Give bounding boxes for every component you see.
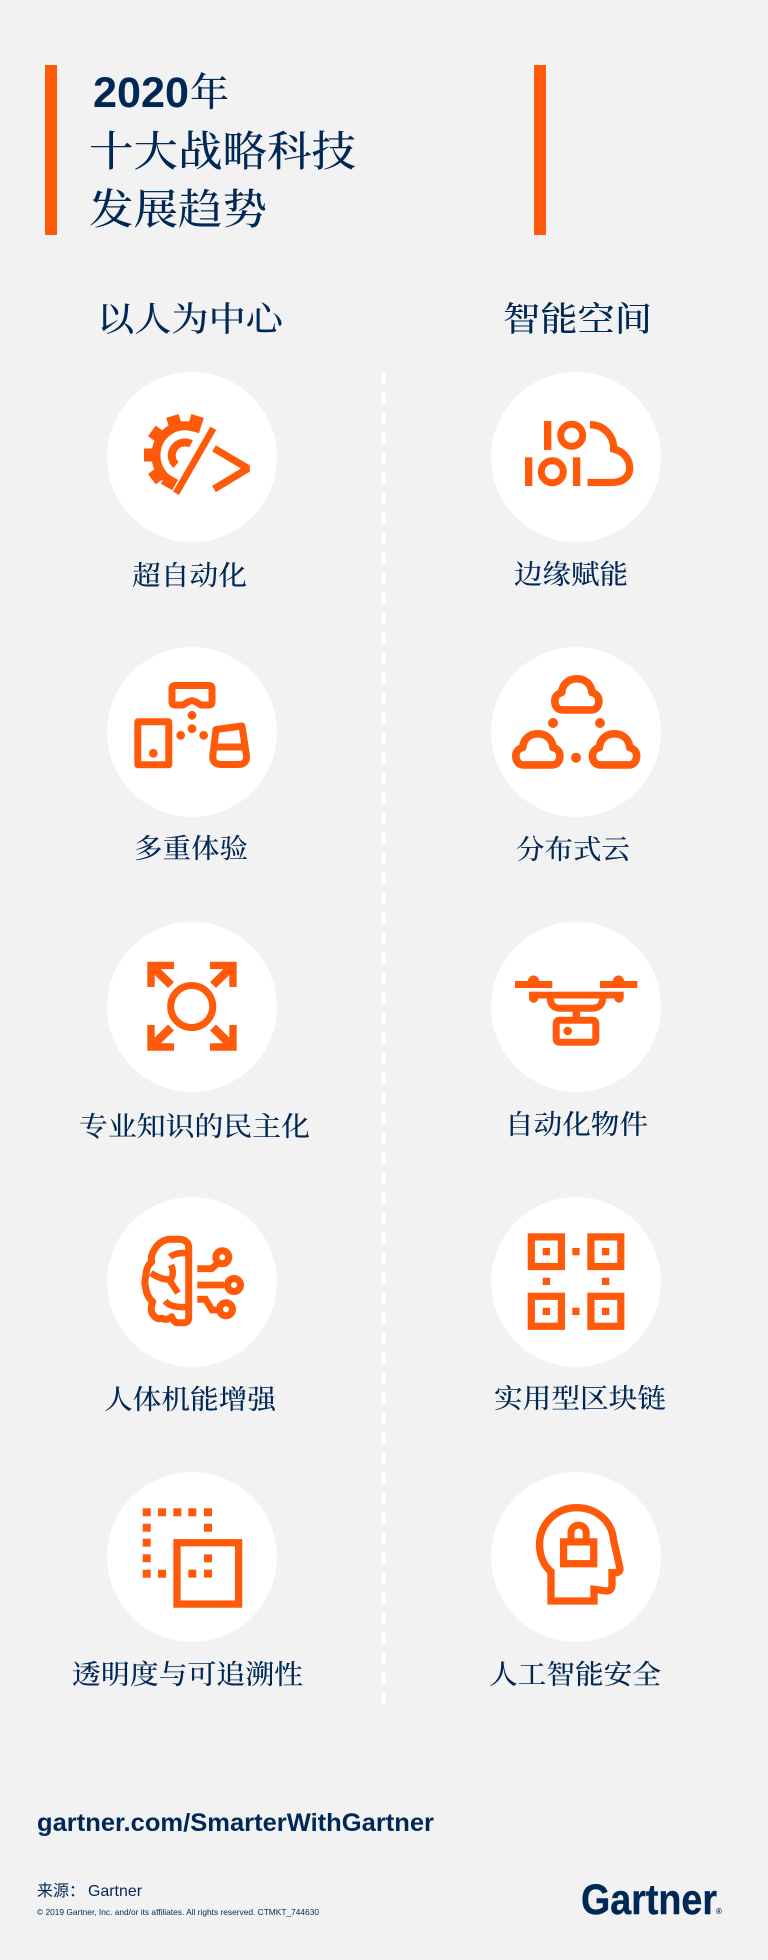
- label: 透明度与可追溯性: [72, 1660, 303, 1690]
- footer URL: gartner.com/SmarterWithGartner: [37, 1809, 434, 1837]
- panel: autonomous things: [491, 922, 661, 1140]
- panel: human augmentation: [104, 1197, 277, 1415]
- icon background circle: [491, 1197, 661, 1367]
- copyright line: © 2019 Gartner, Inc. and/or its affiliates. All rights reserved. CTMKT_744630: [37, 1907, 319, 1917]
- panel: democratization of expertise: [79, 922, 310, 1142]
- icon background circle: [491, 372, 661, 542]
- panel: multiexperience: [107, 647, 277, 864]
- label: 边缘赋能: [514, 560, 628, 590]
- title line 2: 十大战略科技: [89, 130, 356, 176]
- icon background circle: [107, 1472, 277, 1642]
- icon: headset tablet glass: [138, 686, 247, 765]
- panel: transparency and traceability: [72, 1472, 303, 1690]
- icon background circle: [107, 372, 277, 542]
- title panel with orange bars: [45, 65, 546, 235]
- source line: 来源：: [37, 1883, 85, 1900]
- label: 分布式云: [516, 835, 631, 865]
- icon: QR-like blocks: [531, 1237, 621, 1326]
- center dashed divider: [382, 373, 386, 1704]
- source line: Gartner: [88, 1883, 143, 1900]
- icon: three clouds: [516, 679, 637, 765]
- logo wordmark: Gartner: [581, 1876, 717, 1924]
- title year: 2020: [93, 69, 189, 117]
- icon background circle: [491, 647, 661, 817]
- title line 3: 发展趋势: [89, 187, 267, 234]
- label: 超自动化: [132, 561, 247, 591]
- label: 实用型区块链: [494, 1384, 666, 1414]
- Gartner logo: [581, 1876, 722, 1924]
- label: 人工智能安全: [489, 1660, 661, 1690]
- label: 人体机能增强: [104, 1385, 277, 1415]
- icon background circle: [107, 647, 277, 817]
- icon background circle: [107, 922, 277, 1092]
- icon: binary cloud: [525, 421, 630, 486]
- column heading: smart spaces: 智能空间: [503, 301, 652, 339]
- left orange bar: [45, 65, 57, 235]
- panel: practical blockchain: [491, 1197, 666, 1414]
- icon: brain and circuit: [145, 1239, 240, 1323]
- icon background circle: [491, 922, 661, 1092]
- icon: gear and code: [144, 414, 248, 493]
- panel: hyperautomation: [107, 372, 277, 591]
- icon: head with padlock: [540, 1508, 620, 1601]
- icon: circle with four arrows: [151, 965, 233, 1047]
- right orange bar: [534, 65, 546, 235]
- registered mark: ®: [716, 1907, 722, 1916]
- icon: dotted and solid squares: [143, 1508, 239, 1604]
- title year suffix: 年: [190, 72, 229, 115]
- label: 多重体验: [134, 834, 248, 864]
- panel: distributed cloud: [491, 647, 661, 865]
- panel: AI security: [489, 1472, 661, 1690]
- icon background circle: [107, 1197, 277, 1367]
- icon: drone: [515, 976, 637, 1042]
- label: 自动化物件: [505, 1110, 648, 1140]
- column heading: people-centric: 以人为中心: [97, 301, 285, 339]
- icon background circle: [491, 1472, 661, 1642]
- panel: empowered edge: [491, 372, 661, 590]
- label: 专业知识的民主化: [79, 1112, 310, 1142]
